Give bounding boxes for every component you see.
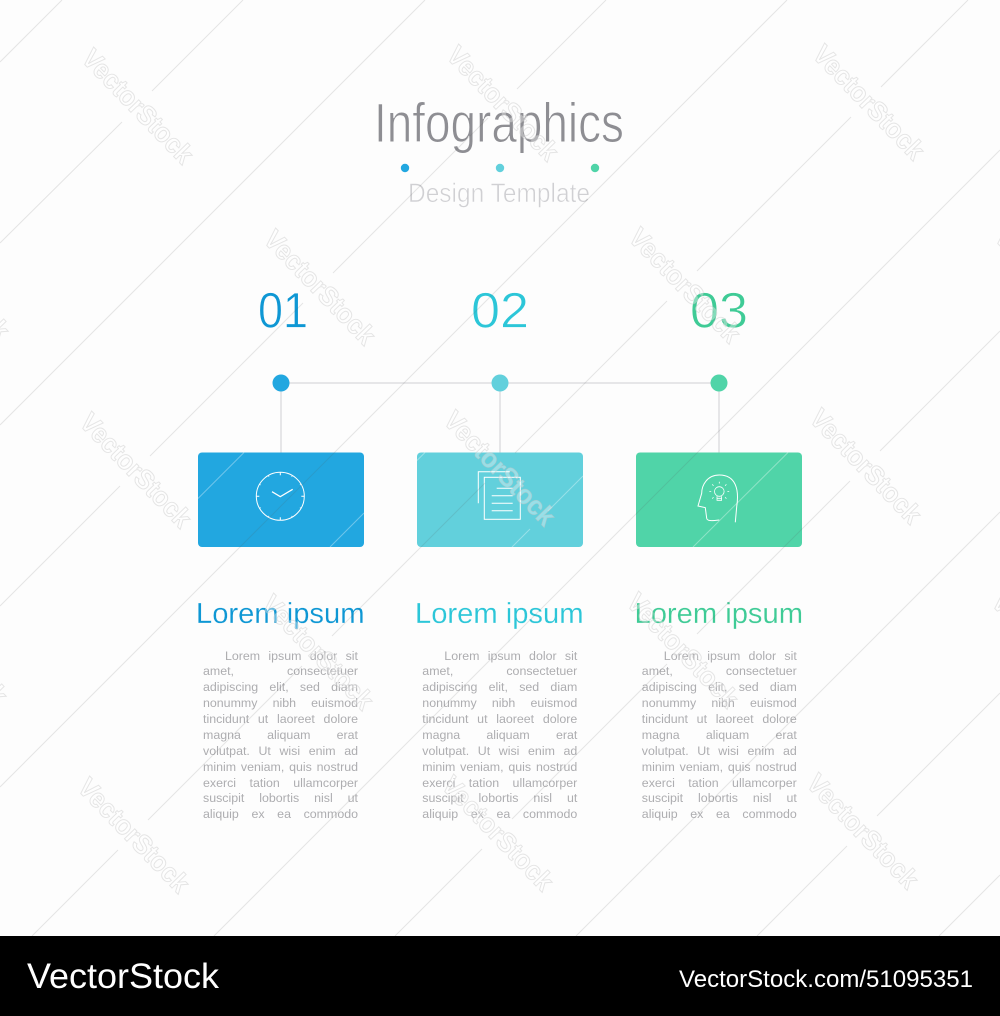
footer bar: VectorStock [27,957,220,996]
watermark overlay: VectorStock [258,224,382,351]
icon: documents [478,472,520,519]
body text 2: minim veniam, quis nostrud [422,760,577,774]
body text 3: magna aliquam erat [642,728,797,742]
icon: head with light bulb [698,475,737,522]
watermark overlay: VectorStock [438,405,562,532]
body text 3: suscipit lobortis nisl ut [642,791,797,805]
body text 1: minim veniam, quis nostrud [203,760,358,774]
body text 2: exerci tation ullamcorper [422,776,577,790]
card 1 [198,452,364,547]
body text 1 [203,649,358,821]
body text 2: amet, consectetuer [422,664,577,678]
heading 3: Lorem ipsum [634,598,803,630]
timeline node 2 [492,374,508,392]
body text 3: Lorem ipsum dolor sit [664,649,797,663]
timeline node 3 [710,374,728,392]
body text 1: amet, consectetuer [203,664,358,678]
title dots [401,164,599,172]
number 03: 03 [690,282,748,338]
title: Infographics [374,91,624,154]
footer bar: VectorStock.com/51095351 [679,966,973,993]
body text 1: tincidunt ut laoreet dolore [203,712,358,726]
icon: clock [256,472,304,520]
watermark overlay: VectorStock [256,589,380,716]
watermark overlay: VectorStock [621,587,745,714]
body text 3 [642,649,797,821]
watermark overlay: VectorStock [623,222,747,349]
watermark overlay: VectorStock [804,403,928,530]
heading 2: Lorem ipsum [415,598,584,630]
body text 3: aliquip ex ea commodo [642,807,797,821]
body text 2: magna aliquam erat [422,728,577,742]
watermark overlay: VectorStock [807,39,931,166]
subtitle: Design Template [408,178,590,208]
body text 2: nonummy nibh euismod [422,696,577,710]
body text 2: Lorem ipsum dolor sit [444,649,577,663]
body text 2: aliquip ex ea commodo [422,807,577,821]
watermark overlay: VectorStock [74,407,198,534]
body text 2: adipiscing elit, sed diam [422,680,577,694]
body text 3: amet, consectetuer [642,664,797,678]
body text 2: volutpat. Ut wisi enim ad [422,744,577,758]
watermark overlay: VectorStock [72,772,196,899]
number 02: 02 [471,282,529,338]
timeline connector [281,383,719,453]
watermark overlay: VectorStock [76,43,200,170]
heading 1: Lorem ipsum [196,598,364,630]
body text 1: aliquip ex ea commodo [203,807,358,821]
body text 1: Lorem ipsum dolor sit [225,649,358,663]
body text 1: volutpat. Ut wisi enim ad [203,744,358,758]
body text 3: volutpat. Ut wisi enim ad [642,744,797,758]
card 3 [636,452,802,547]
body text 1: exerci tation ullamcorper [203,776,358,790]
watermark overlay: VectorStock [441,40,565,167]
body text 1: adipiscing elit, sed diam [203,680,358,694]
body text 2 [422,649,578,821]
body text 1: magna aliquam erat [203,728,358,742]
body text 3: adipiscing elit, sed diam [642,680,797,694]
card 2 [417,452,583,547]
body text 1: suscipit lobortis nisl ut [203,791,358,805]
body text 3: minim veniam, quis nostrud [642,760,797,774]
body text 3: tincidunt ut laoreet dolore [642,712,797,726]
number 01: 01 [258,282,308,338]
body text 2: tincidunt ut laoreet dolore [422,712,577,726]
watermark overlay: VectorStock [801,768,925,895]
timeline node 1 [272,374,290,392]
body text 1: nonummy nibh euismod [203,696,358,710]
body text 2: suscipit lobortis nisl ut [422,791,577,805]
watermark overlay: VectorStock [436,770,560,897]
body text 3: exerci tation ullamcorper [642,776,797,790]
body text 3: nonummy nibh euismod [642,696,797,710]
